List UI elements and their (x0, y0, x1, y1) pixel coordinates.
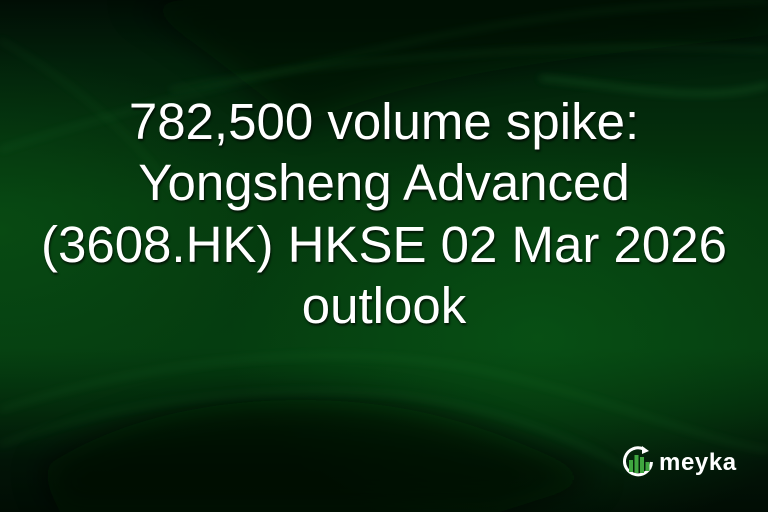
title: 782,500 volume spike: (129, 93, 639, 150)
icon: circle with bars (625, 446, 652, 475)
wordmark: meyka (659, 449, 737, 476)
title (41, 93, 727, 334)
logo: meyka (622, 446, 737, 476)
title: outlook (302, 277, 466, 334)
title: Yongsheng Advanced (138, 154, 630, 211)
title: (3608.HK) HKSE 02 Mar 2026 (41, 216, 727, 273)
